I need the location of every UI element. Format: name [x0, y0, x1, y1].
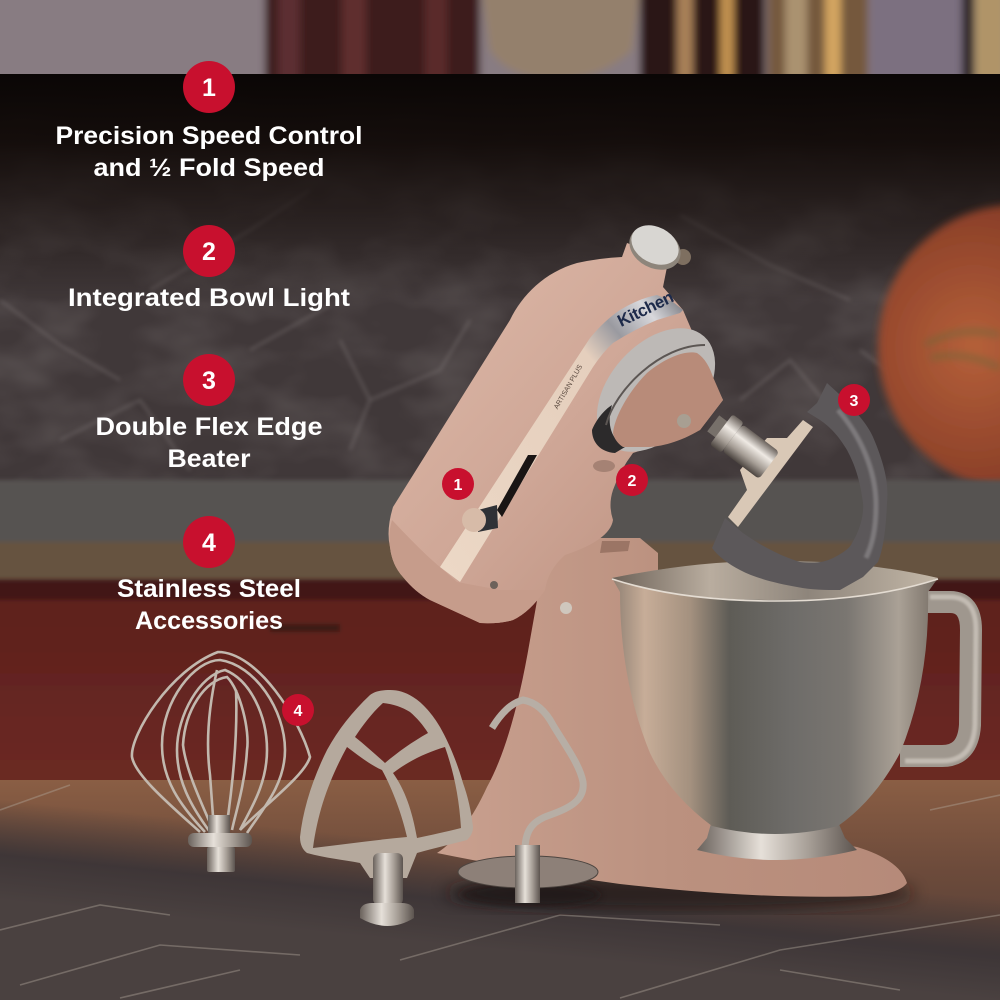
marker 4 on whisk: 4: [294, 703, 303, 720]
marker 2 on bowl light: [616, 464, 648, 496]
splash disc: [458, 856, 598, 888]
marker 3 on beater: [838, 384, 870, 416]
badge 2: [183, 225, 235, 277]
hinge pin: [560, 602, 572, 614]
badge 2: 2: [202, 238, 216, 266]
speed slot: [497, 455, 537, 517]
beater blade: [728, 420, 813, 527]
feature 1: [56, 61, 362, 182]
mixer head: [389, 217, 738, 623]
bowl handle: [900, 602, 971, 756]
base shadow: [445, 875, 915, 911]
background: countertop veins: [0, 785, 1000, 998]
brand on band: Kitchen: [614, 287, 677, 331]
heading 4: Stainless Steel: [117, 575, 301, 603]
bowl rim line: [612, 579, 938, 601]
whisk hub: [188, 815, 252, 872]
badge 4: 4: [202, 529, 216, 557]
background: top shelf with blurred jars: [0, 0, 1000, 74]
feature 4: [117, 516, 301, 635]
background: marble wall: [0, 78, 1000, 486]
light button: [593, 460, 615, 472]
screw on head base: [490, 581, 498, 589]
silicone edge: [712, 383, 887, 590]
background: marble countertop: [0, 780, 1000, 942]
heading 1: Precision Speed Control: [56, 122, 362, 150]
speed dial top: [622, 217, 691, 278]
background: wood board: [878, 205, 1000, 489]
head nose: [613, 352, 723, 447]
mixer stand and base: [437, 538, 915, 911]
bowl: [612, 561, 976, 860]
hook shaft: [515, 845, 540, 903]
flat beater foot: [360, 903, 414, 926]
flat beater attachment: [300, 690, 473, 926]
background: red cabinets: [0, 580, 1000, 785]
badge 1: 1: [202, 74, 216, 102]
marker 1 on speed control: 1: [454, 477, 463, 494]
feature 2: [68, 225, 351, 312]
feature 3: [96, 354, 323, 473]
badge 4: [183, 516, 235, 568]
numbered features list: [56, 61, 362, 635]
hook wire: [492, 700, 583, 850]
silicone highlight: [838, 410, 876, 558]
model text: ARTISAN PLUS: [553, 364, 584, 411]
background: dark shelf shadow: [0, 74, 1000, 304]
flat beater frame: [300, 690, 473, 878]
beater hub: [702, 408, 781, 481]
bowl body: [612, 562, 938, 834]
heading 1: [56, 122, 362, 182]
heading 4: Accessories: [135, 607, 283, 635]
badge 3: 3: [202, 367, 216, 395]
badge 1: [183, 61, 235, 113]
heading 2: Integrated Bowl Light: [68, 284, 351, 312]
marker 3 on beater: 3: [850, 393, 859, 410]
marker 2 on bowl light: 2: [628, 473, 637, 490]
nose screw: [677, 414, 691, 428]
lower head shade: [389, 520, 545, 623]
handle highlight: [905, 597, 976, 761]
marker 1 on speed control: [442, 468, 474, 500]
ring dark lower section: [592, 405, 625, 453]
heading 4: [117, 575, 301, 635]
lever: [462, 505, 498, 532]
background: dark front of countertop: [0, 800, 1000, 1000]
background: wall cloud texture: [0, 234, 926, 480]
heading 3: [96, 413, 323, 473]
head body: [389, 243, 723, 623]
marker 4 on whisk: [282, 694, 314, 726]
head ring: [574, 306, 738, 474]
heading 1: and ½ Fold Speed: [94, 154, 324, 182]
bowl interior: [612, 561, 938, 600]
background: back counter: [0, 480, 1000, 582]
metal trim band: [440, 295, 683, 582]
ring inner line: [606, 345, 705, 425]
badge 3: [183, 354, 235, 406]
stand pedestal: [437, 538, 907, 897]
heading 3: Double Flex Edge: [96, 413, 323, 441]
whisk attachment: [132, 652, 310, 872]
bowl foot: [697, 820, 857, 860]
background: marble veins: [1, 260, 877, 470]
flat beater shaft: [373, 853, 403, 905]
stand vent mark: [600, 541, 630, 553]
flex edge beater: [702, 383, 887, 590]
heading 3: Beater: [168, 445, 251, 473]
dough hook attachment: [458, 700, 600, 907]
